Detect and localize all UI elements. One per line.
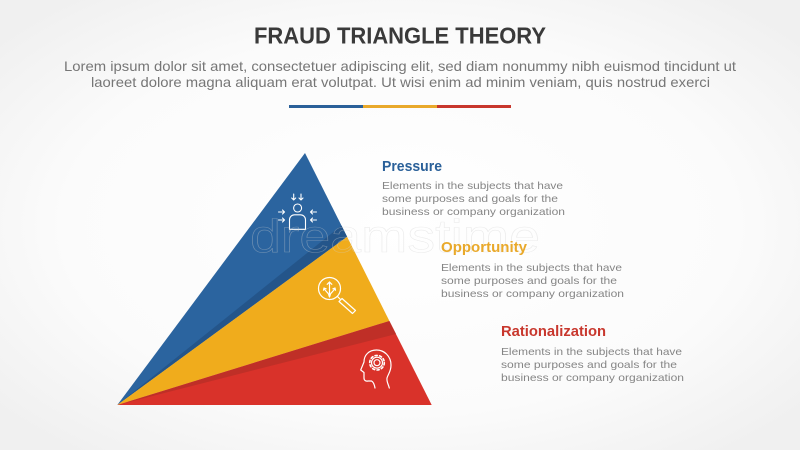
heading: pressure: Pressure (382, 158, 442, 175)
watermark: dreamstime (250, 210, 540, 262)
intro text: laoreet dolore magna aliquam erat volutpat. Ut wisi enim ad minim veniam, quis nostrud exerci (91, 74, 710, 90)
segment shadow: pressure (117, 226, 347, 405)
title: FRAUD TRIANGLE THEORY (254, 22, 546, 48)
body: pressure (382, 180, 565, 218)
body: rationalization (501, 346, 684, 384)
icon: person under pressure (278, 194, 316, 229)
heading: opportunity: Opportunity (441, 239, 528, 256)
body: opportunity (441, 262, 624, 300)
body: opportunity: some purposes and goals for the (441, 275, 617, 287)
body: opportunity: Elements in the subjects that have (441, 262, 622, 274)
text block: pressure (382, 158, 565, 218)
body: opportunity: business or company organization (441, 288, 624, 300)
body: pressure: business or company organization (382, 206, 565, 218)
tricolor divider (289, 105, 511, 108)
icon: magnifier with arrows (318, 278, 356, 314)
icon: head with gear (361, 350, 391, 388)
segment: rationalization (117, 321, 432, 405)
body: pressure: Elements in the subjects that have (382, 180, 563, 192)
intro text (64, 58, 736, 90)
body: rationalization: Elements in the subjects that have (501, 346, 682, 358)
text block: rationalization (501, 323, 684, 384)
heading: rationalization: Rationalization (501, 323, 606, 340)
intro text: Lorem ipsum dolor sit amet, consectetuer adipiscing elit, sed diam nonummy nibh euismod tincidunt ut (64, 58, 736, 74)
body: rationalization: business or company organization (501, 372, 684, 384)
triangle chart (117, 153, 432, 405)
body: pressure: some purposes and goals for the (382, 193, 558, 205)
body: rationalization: some purposes and goals for the (501, 359, 677, 371)
segment: opportunity (117, 237, 389, 405)
segment shadow: rationalization (117, 321, 396, 405)
segment: pressure (117, 153, 347, 405)
text block: opportunity (441, 239, 624, 300)
